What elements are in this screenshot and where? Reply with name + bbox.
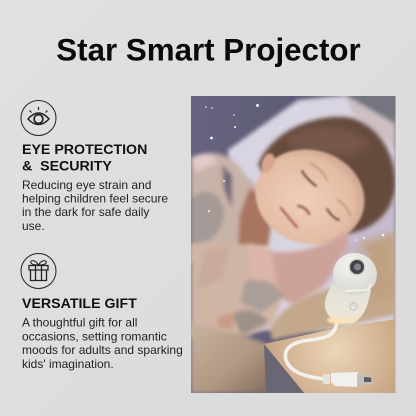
text: eye protection description: Reducing eye strain and — [22, 178, 151, 192]
text: versatile gift description: occasions, setting romantic — [22, 330, 167, 344]
projected light glow — [324, 238, 372, 282]
face — [254, 148, 366, 246]
starry wall — [191, 96, 396, 393]
heading: eye protection: & SECURITY — [22, 158, 112, 174]
text: versatile gift description: moods for adults and sparking — [22, 343, 183, 357]
bedding right — [270, 272, 396, 340]
icon: gift — [21, 254, 56, 288]
panel: eye protection and security — [21, 100, 168, 233]
USB plug — [323, 372, 373, 387]
power symbol — [350, 302, 357, 310]
heading: eye protection: EYE PROTECTION — [22, 142, 147, 158]
hand and arm — [270, 234, 352, 305]
projector base glow — [327, 316, 357, 324]
text: eye protection description: use. — [22, 219, 45, 233]
blanket lower — [191, 322, 272, 393]
heading: versatile gift: VERSATILE GIFT — [22, 296, 137, 312]
text: eye protection description: in the dark for safe daily — [22, 205, 149, 219]
heading: eye protection — [22, 142, 147, 174]
icon: eye — [21, 100, 56, 136]
bedside table — [264, 319, 396, 393]
photo: child sleeping beside projector — [191, 95, 396, 393]
projector head — [333, 253, 377, 295]
pajama top — [191, 153, 262, 262]
panel: versatile gift — [21, 254, 183, 371]
stars — [205, 104, 384, 241]
projector cable — [285, 322, 337, 379]
projector body — [325, 283, 371, 323]
text: eye protection description: helping children feel secure — [22, 192, 168, 206]
ear — [260, 152, 276, 173]
pillow — [228, 95, 396, 330]
projector lens — [348, 258, 366, 276]
text: versatile gift description — [22, 316, 183, 371]
projector clip — [345, 284, 371, 291]
closed eyes, nose and mouth — [281, 163, 350, 227]
text: eye protection description — [22, 178, 168, 233]
neck — [238, 188, 274, 250]
hair — [258, 117, 395, 234]
pajama sleeve — [191, 243, 284, 338]
text: versatile gift description: kids' imagination. — [22, 357, 114, 371]
title: Star Smart Projector — [56, 32, 361, 68]
text: versatile gift description: A thoughtful gift for all — [22, 316, 137, 330]
